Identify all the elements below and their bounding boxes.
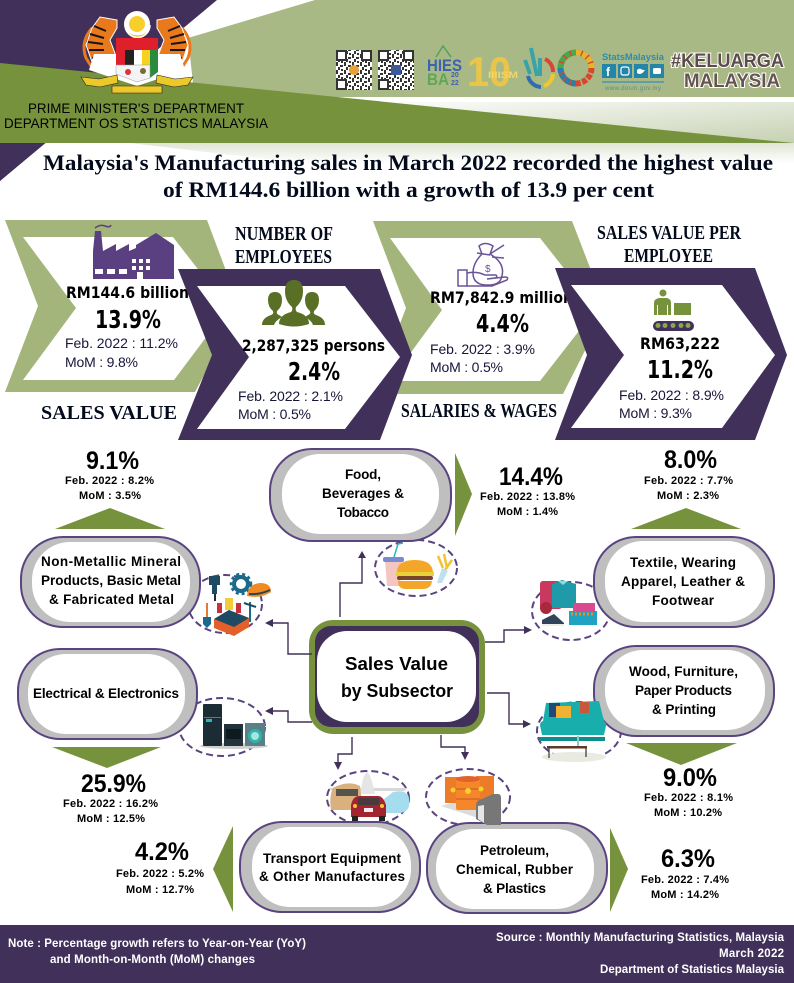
comparison	[619, 387, 724, 421]
arrow: to electrical	[265, 707, 312, 722]
source: March 2022	[719, 948, 784, 960]
growth arrow: electrical	[52, 747, 161, 768]
comparison: MoM : 0.5%	[238, 406, 311, 422]
subsector: food: Tobacco	[337, 505, 389, 520]
subsector: petroleum: Chemical, Rubber	[456, 862, 574, 877]
department name	[4, 100, 269, 131]
stat: textile: MoM : 2.3%	[657, 490, 719, 502]
comparison: Feb. 2022 : 2.1%	[238, 388, 343, 404]
icon: factory	[93, 225, 174, 279]
comparison: MoM : 0.5%	[430, 359, 503, 375]
arrow: to metal	[265, 619, 312, 654]
icon: appliances	[200, 704, 268, 749]
growth rate: 2.4%	[288, 357, 340, 386]
growth rate: 4.4%	[476, 309, 529, 338]
subsector: food	[270, 449, 451, 541]
heading: number of employees: NUMBER OF	[235, 223, 333, 245]
growth rate: 13.9%	[95, 305, 161, 334]
growth arrow: food	[455, 453, 472, 536]
logo: HIES BA 2022: 22	[451, 80, 459, 87]
stat: electrical	[63, 770, 158, 825]
source: Source : Monthly Manufacturing Statistics, Malaysia	[496, 932, 785, 944]
logo: census chart	[525, 48, 553, 87]
logo: StatsMalaysia social: StatsMalaysia	[602, 52, 665, 62]
stat: wood: Feb. 2022 : 8.1%	[644, 792, 733, 804]
stat: petroleum: MoM : 14.2%	[651, 889, 719, 901]
stat: electrical: MoM : 12.5%	[77, 813, 145, 825]
source	[496, 932, 785, 976]
comparison	[430, 341, 535, 375]
stat: transport: 4.2%	[135, 838, 189, 866]
stat: textile: 8.0%	[664, 446, 717, 474]
icon: money bag in hand: $	[485, 264, 491, 275]
stat: food: MoM : 1.4%	[497, 506, 558, 518]
logo: Keluarga Malaysia: MALAYSIA	[684, 71, 780, 92]
center box: sales value by subsector: Sales Value	[345, 654, 448, 674]
comparison: MoM : 9.3%	[619, 405, 692, 421]
heading: sales value per employee	[597, 222, 741, 267]
title: Malaysia's Manufacturing sales in March 2022 recorded the highest value	[43, 150, 773, 175]
logo: StatsMalaysia social	[602, 52, 665, 92]
stat: wood: 9.0%	[663, 764, 717, 792]
stat: food	[480, 463, 575, 518]
comparison	[65, 335, 178, 370]
arrow: to petroleum	[441, 735, 469, 760]
comparison	[238, 388, 343, 422]
department name: PRIME MINISTER'S DEPARTMENT	[28, 100, 244, 116]
panel: sales value	[5, 220, 240, 392]
icon: sofa	[539, 701, 606, 762]
arrow: to transport	[334, 737, 352, 770]
stat: wood	[644, 764, 733, 819]
logo: Keluarga Malaysia	[671, 51, 784, 92]
heading: number of employees: EMPLOYEES	[235, 246, 332, 268]
stat: metal: MoM : 3.5%	[79, 490, 141, 502]
logo: 10 years: IIIISM	[488, 70, 518, 80]
icon: people	[262, 280, 325, 326]
note: Note : Percentage growth refers to Year-on-Year (YoY)	[8, 938, 306, 950]
arrow: to food	[340, 551, 366, 617]
logo: StatsMalaysia social: www.dosm.gov.my	[604, 86, 661, 92]
logo: SDG wheel	[560, 52, 592, 84]
stat: wood: MoM : 10.2%	[654, 807, 722, 819]
stat: transport	[116, 838, 204, 896]
comparison: Feb. 2022 : 8.9%	[619, 387, 724, 403]
title	[43, 150, 773, 202]
subsector: non-metallic: Products, Basic Metal	[41, 573, 181, 588]
icon: clothes	[540, 580, 597, 626]
stat: textile: Feb. 2022 : 7.7%	[644, 475, 733, 487]
panel: number of employees	[178, 269, 412, 440]
value: RM7,842.9 million	[430, 288, 573, 307]
logo: Keluarga Malaysia: #KELUARGA	[671, 51, 784, 72]
value: RM144.6 billion	[66, 283, 189, 302]
comparison: Feb. 2022 : 11.2%	[65, 335, 178, 351]
icon: worker with conveyor	[653, 290, 694, 331]
value: RM63,222	[640, 334, 720, 353]
subsector: transport: & Other Manufactures	[259, 869, 405, 884]
icon: burger and drink	[383, 543, 452, 589]
subsector: textile	[594, 537, 774, 627]
heading: sales value per employee: EMPLOYEE	[624, 245, 713, 267]
arrow: to textile	[485, 626, 532, 642]
subsector: wood	[594, 646, 774, 736]
logo: StatsMalaysia social: f	[606, 65, 611, 79]
subsector: non-metallic: Non-Metallic Mineral	[41, 554, 181, 569]
header background	[0, 0, 794, 181]
header logos	[336, 46, 784, 95]
growth arrow: wood	[626, 743, 737, 765]
icon: metal tools	[203, 574, 271, 636]
heading: number of employees	[235, 223, 333, 268]
arrow: to wood	[487, 693, 531, 728]
subsector: wood: Wood, Furniture,	[629, 664, 738, 679]
department name: DEPARTMENT OS STATISTICS MALAYSIA	[4, 115, 269, 131]
growth rate: 11.2%	[647, 355, 713, 384]
subsector: petroleum: Petroleum,	[480, 843, 549, 858]
stat: metal: Feb. 2022 : 8.2%	[65, 475, 154, 487]
icon: coat of arms crest	[81, 11, 193, 93]
footer	[0, 925, 794, 983]
subsector: transport: Transport Equipment	[263, 851, 402, 866]
icon: QR code portal	[336, 50, 372, 90]
stat: electrical: Feb. 2022 : 16.2%	[63, 798, 158, 810]
note: and Month-on-Month (MoM) changes	[50, 954, 255, 966]
icon: vehicles	[328, 772, 409, 821]
logo: HIES BA 2022: 20	[451, 72, 459, 79]
heading: sales value per employee: SALES VALUE PER	[597, 222, 741, 244]
subsector: food: Food,	[345, 467, 381, 482]
heading: sales value: SALES VALUE	[41, 402, 177, 424]
stat: food: Feb. 2022 : 13.8%	[480, 491, 575, 503]
stat: textile	[644, 446, 733, 502]
subsector: electrical	[18, 649, 197, 739]
subsector: non-metallic	[21, 537, 200, 627]
heading: salaries and wages: SALARIES & WAGES	[401, 400, 557, 422]
stat: food: 14.4%	[499, 463, 563, 491]
logo: HIES BA 2022: HIES	[427, 56, 462, 75]
center box: sales value by subsector	[309, 620, 485, 734]
logo: 10 years: 10	[467, 48, 511, 95]
icon: money bag in hand	[458, 244, 508, 286]
stat: transport: MoM : 12.7%	[126, 884, 194, 896]
growth arrow: petroleum	[610, 828, 628, 912]
stat: transport: Feb. 2022 : 5.2%	[116, 868, 204, 880]
subsector: petroleum	[427, 823, 607, 913]
panel: salaries and wages	[373, 221, 606, 394]
subsector: petroleum: & Plastics	[483, 881, 546, 896]
stat: petroleum: Feb. 2022 : 7.4%	[641, 874, 729, 886]
panel: sales value per employee	[555, 268, 787, 440]
stat: metal	[65, 447, 154, 502]
subsector: textile: Apparel, Leather &	[621, 574, 745, 589]
subsector: wood: Paper Products	[635, 683, 732, 698]
stat: petroleum: 6.3%	[661, 845, 715, 873]
comparison: Feb. 2022 : 3.9%	[430, 341, 535, 357]
subsector: food: Beverages &	[322, 486, 404, 501]
stat: petroleum	[641, 845, 729, 901]
stat: metal: 9.1%	[86, 447, 139, 475]
note	[8, 938, 306, 966]
subsector: electrical: Electrical & Electronics	[33, 686, 179, 701]
icon: QR code facebook	[378, 50, 414, 90]
source: Department of Statistics Malaysia	[600, 964, 785, 976]
stat: electrical: 25.9%	[81, 770, 146, 798]
growth arrow: transport	[213, 826, 233, 912]
logo: HIES BA 2022	[427, 46, 462, 89]
value: 2,287,325 persons	[242, 336, 385, 355]
icon: oil barrels	[441, 776, 503, 825]
subsector: textile: Footwear	[652, 593, 715, 608]
subsector: non-metallic: & Fabricated Metal	[49, 592, 174, 607]
logo: HIES BA 2022: BA	[427, 70, 449, 89]
growth arrow: metal	[55, 508, 165, 529]
growth arrow: textile	[631, 508, 741, 529]
subsector: wood: & Printing	[652, 702, 716, 717]
title: of RM144.6 billion with a growth of 13.9 per cent	[163, 177, 655, 202]
center box: sales value by subsector: by Subsector	[341, 681, 453, 701]
dashed icon ellipses	[179, 540, 621, 825]
comparison: MoM : 9.8%	[65, 354, 138, 370]
subsector: textile: Textile, Wearing	[630, 555, 736, 570]
subsector: transport	[240, 822, 420, 912]
